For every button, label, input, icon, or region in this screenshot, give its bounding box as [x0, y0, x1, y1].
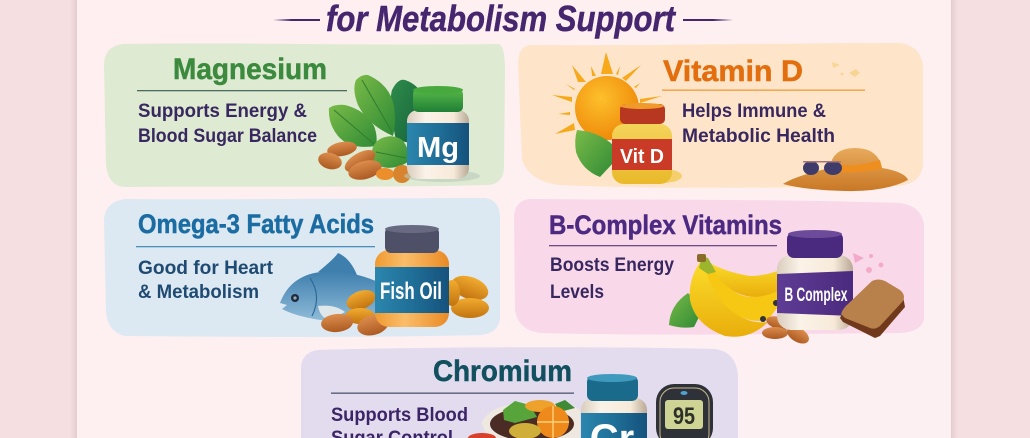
text: b-complex benefit: Levels [550, 282, 604, 303]
icon: fish [280, 253, 382, 321]
icon: Vit D bottle [612, 103, 682, 184]
text: omega-3 benefit: Good for Heart [138, 258, 274, 279]
text: magnesium benefit: Blood Sugar Balance [138, 126, 317, 147]
icon: sun [552, 52, 662, 140]
panel: magnesium [104, 43, 505, 187]
icon: leaf [669, 293, 700, 328]
icon: green leaf [575, 130, 614, 177]
text: omega-3 benefit [138, 258, 274, 303]
text: chromium benefit [331, 405, 468, 438]
text: vitamin d benefit: Helps Immune & [682, 101, 826, 122]
icon: sun hat and sunglasses [783, 148, 908, 191]
icon: b complex bottle: B Complex [784, 285, 848, 306]
icon: almonds [762, 314, 812, 347]
icon: chromium bottle [581, 374, 647, 438]
icon: toast [840, 280, 905, 338]
icon: b complex bottle [777, 230, 853, 330]
text: vitamin d benefit: Metabolic Health [682, 126, 835, 147]
icon: fish oil capsules and almonds [320, 271, 492, 339]
panel: omega-3 [104, 198, 500, 339]
heading: magnesium: Magnesium [173, 53, 327, 86]
text: magnesium benefit: Supports Energy & [138, 101, 307, 122]
heading: b-complex: B-Complex Vitamins [549, 210, 782, 240]
icon: fish oil bottle: Fish Oil [380, 278, 442, 305]
text: b-complex benefit: Boosts Energy [550, 255, 674, 276]
icon: Mg bottle [404, 86, 480, 182]
text: chromium benefit: Supports Blood [331, 405, 468, 426]
icon: almonds and nuts [316, 140, 424, 183]
icon: food bowl [468, 400, 580, 438]
text: vitamin d benefit [682, 101, 835, 147]
text: b-complex benefit [550, 255, 674, 303]
icon: fish oil bottle [375, 225, 449, 327]
icon: glucose meter: 95 [673, 403, 695, 430]
heading: chromium: Chromium [433, 355, 572, 388]
heading: omega-3: Omega-3 Fatty Acids [138, 209, 374, 239]
panel: vitamin d [518, 43, 923, 191]
icon: Mg bottle: Mg [417, 132, 459, 164]
icon: spinach leaves [329, 75, 424, 168]
icon: bananas [690, 254, 780, 337]
icon: sparkles [853, 253, 883, 273]
text: omega-3 benefit: & Metabolism [138, 282, 259, 303]
heading: vitamin d: Vitamin D [663, 55, 803, 88]
icon: sparkles [832, 62, 860, 77]
icon: Vit D bottle: Vit D [620, 146, 664, 168]
text: magnesium benefit [138, 101, 317, 147]
panel: chromium [301, 347, 738, 438]
panel: b-complex [514, 199, 924, 347]
icon: glucose meter [656, 384, 713, 438]
